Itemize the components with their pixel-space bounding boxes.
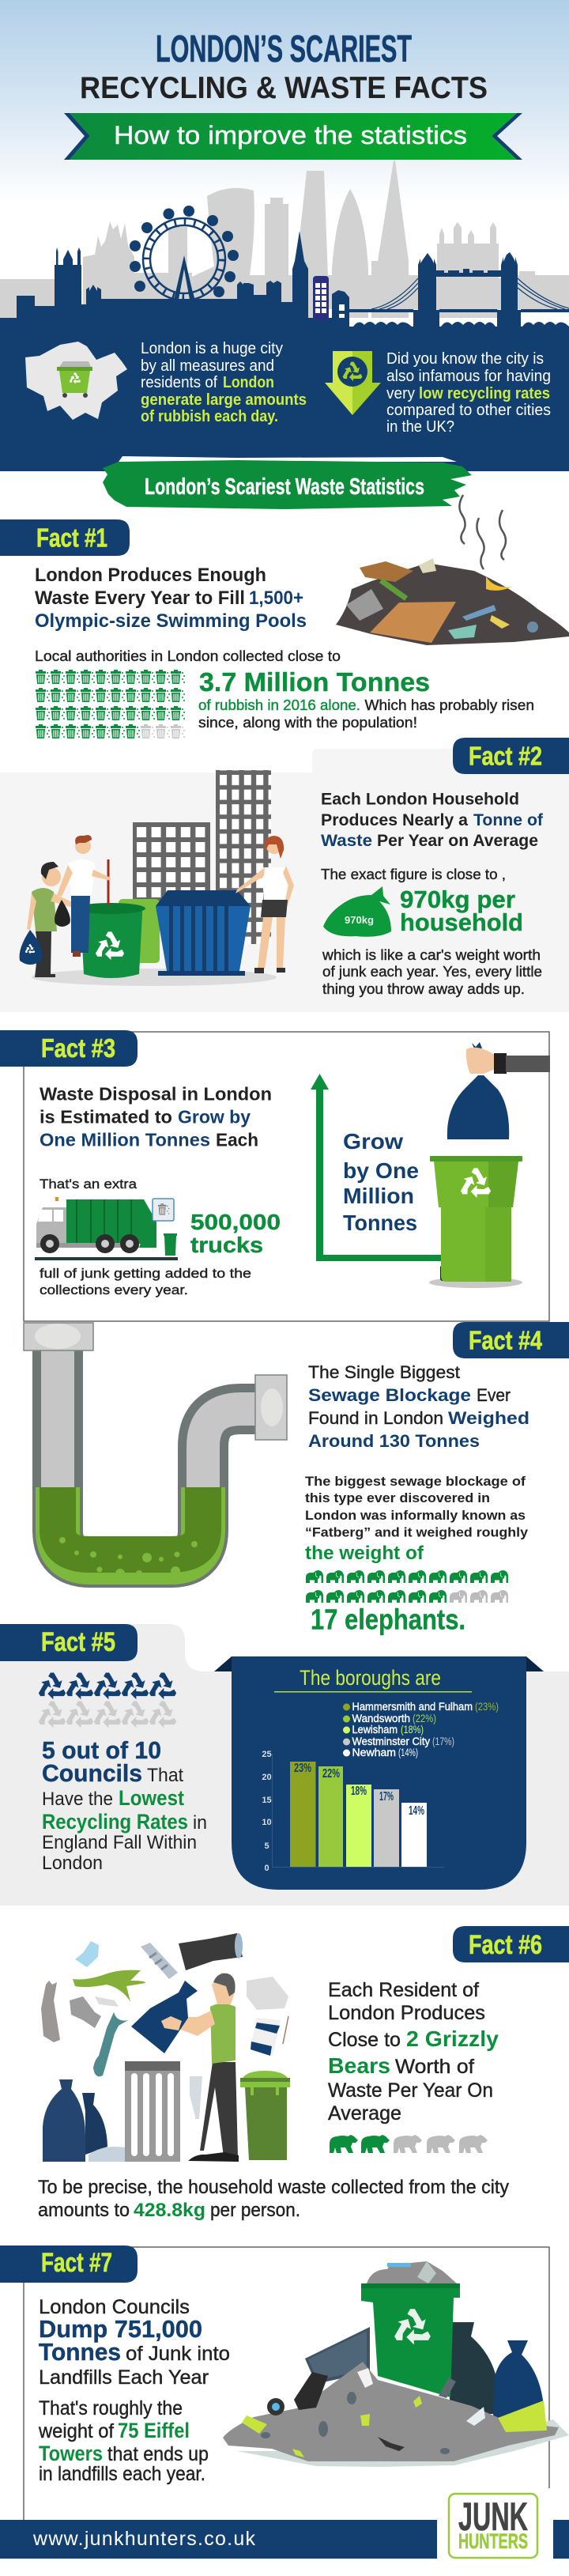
icon: hand dropping bag into bin (429, 1042, 550, 1288)
heading: fact 7: London Councils (39, 2296, 190, 2318)
heading: fact 7: Dump 751,000 (39, 2315, 202, 2343)
tab: fact 2 (453, 738, 569, 774)
heading: fact 2: Per Year on Average (377, 832, 538, 850)
text: intro right: very (386, 385, 415, 402)
text: 428.8kg: amounts to (38, 2200, 130, 2221)
bar chart: boroughs: 15 (262, 1796, 272, 1805)
text: eiffel towers: That's roughly the (39, 2397, 183, 2419)
heading: fact 5: England Fall Within (42, 1832, 197, 1853)
skyline: grey buildings (0, 161, 569, 319)
title: RECYCLING & WASTE FACTS (80, 71, 488, 105)
heading: fact 6 (328, 1979, 499, 2125)
text: car's weight (322, 947, 542, 997)
text: fatberg (305, 1474, 529, 1540)
text: grow by one million tonnes: Million (343, 1184, 414, 1208)
logo: Junk Hunters: HUNTERS (458, 2529, 528, 2553)
text: fatberg: The biggest sewage blockage of (305, 1474, 526, 1489)
banner: section heading: London’s Scariest Waste Statistics (145, 474, 424, 500)
text: grow by one million tonnes: Tonnes (343, 1211, 417, 1235)
heading: fact 6: London Produces (328, 2002, 485, 2024)
text: eiffel towers: that ends up (107, 2443, 209, 2465)
tab: fact 7: Fact #7 (41, 2248, 112, 2278)
text: 428.8kg: 428.8kg (134, 2200, 205, 2221)
panel: fact 2 (0, 738, 569, 1012)
bar chart: boroughs: 14% (409, 1804, 424, 1818)
panel: fact 7 (0, 2246, 569, 2520)
legend: boroughs: Westminster City (352, 1735, 430, 1747)
title: LONDON’S SCARIEST (156, 28, 412, 70)
bar chart: boroughs: 25 (262, 1750, 272, 1759)
stat: 970kg per household: household (400, 908, 523, 936)
text: intro right: also infamous for having (386, 368, 551, 385)
text: intro left (141, 340, 307, 425)
illustration: man throwing rubbish (41, 1933, 290, 2162)
white arches in gatehouse (339, 304, 345, 318)
text: intro left: London (223, 374, 274, 391)
text: eiffel towers: Towers (39, 2442, 103, 2465)
text: grow by one million tonnes: by One (343, 1158, 419, 1183)
icon: phone box (313, 276, 329, 320)
heading: fact 5: Recycling Rates (42, 1810, 188, 1834)
text: collections: full of junk getting added to the (40, 1266, 251, 1281)
heading: fact 2: Waste (321, 832, 372, 850)
text: collections (40, 1266, 251, 1297)
illustration: blocked pipe (24, 1323, 287, 1578)
text: intro left: residents of (141, 374, 217, 391)
tab: fact 6: Fact #6 (469, 1930, 542, 1960)
heading: boroughs: The boroughs are (300, 1666, 441, 1690)
chart: recycling symbols pictogram (35, 1672, 178, 1732)
text: fatberg: “Fatberg” and it weighed roughly (305, 1524, 529, 1540)
legend: boroughs: Wandsworth (352, 1712, 410, 1724)
tab: fact 5: Fact #5 (41, 1627, 115, 1657)
text: exact figure: The exact figure is close to , (321, 867, 506, 882)
tab: fact 1 (0, 519, 130, 556)
legend: boroughs: (23%) (475, 1700, 499, 1713)
heading: fact 5: 5 out of 10 (42, 1736, 161, 1764)
text: 428.8kg (38, 2177, 509, 2221)
stat: 3.7 million tonnes: 3.7 Million Tonnes (199, 667, 430, 697)
stat: 970kg per household: 970kg per (400, 886, 515, 913)
text: collections: collections every year. (40, 1282, 188, 1297)
text: fatberg: London was informally known as (305, 1508, 526, 1523)
heading: fact 3: is Estimated to (40, 1107, 172, 1127)
heading: fact 6: Bears (328, 2053, 390, 2078)
stat: 500,000 trucks (190, 1210, 281, 1257)
heading: fact 5: That (147, 1765, 183, 1786)
panel: boroughs chart (214, 1656, 544, 1890)
legend: boroughs: (22%) (413, 1712, 436, 1724)
heading: fact 6: Worth of (395, 2056, 474, 2078)
bar chart: boroughs: 20 (262, 1773, 272, 1782)
heading: fact 2: Each London Household (321, 791, 519, 808)
stat: 500,000 trucks: 500,000 (190, 1210, 281, 1234)
text: car's weight: which is like a car's weight worth (322, 947, 541, 963)
panel: fact 3 (0, 1030, 550, 1321)
logo: Junk Hunters: JUNK (458, 2495, 528, 2539)
text: car's weight: thing you throw away adds up. (322, 981, 525, 997)
heading: fact 4: Sewage Blockage (308, 1385, 471, 1405)
heading: fact 5: London (42, 1853, 103, 1874)
text: fatberg: this type ever discovered in (305, 1490, 490, 1505)
stat: 17 elephants: 17 elephants. (311, 1603, 465, 1635)
tab: fact 1: Fact #1 (36, 523, 107, 552)
legend: boroughs: Newham (352, 1746, 396, 1758)
stat: 3.7 million tonnes: Which has probably risen (365, 697, 534, 713)
figure: woman (236, 836, 294, 973)
panel: fact 1 (0, 495, 569, 738)
figure: man with broom (57, 835, 111, 957)
stat: 3.7 million tonnes (198, 667, 534, 731)
text: intro left: of rubbish each day. (141, 408, 278, 425)
icon: garbage truck (35, 1197, 178, 1260)
text: eiffel towers: weight of (38, 2420, 114, 2442)
text: grow by one million tonnes (343, 1129, 419, 1235)
tab: fact 5 (0, 1624, 138, 1661)
text: intro right: Did you know the city is (386, 350, 544, 368)
legend: boroughs: (18%) (401, 1723, 424, 1736)
bar chart: boroughs: 18% (351, 1785, 367, 1798)
heading: fact 5 (42, 1736, 207, 1874)
panel background (0, 749, 569, 1012)
text: intro left: generate large amounts (141, 391, 307, 409)
heading: fact 1 (35, 565, 307, 632)
panel: fact 4 (24, 1322, 569, 1635)
title (80, 28, 488, 105)
heading: fact 2: Tonne of (473, 811, 544, 829)
heading: fact 7 (39, 2296, 230, 2389)
heading: fact 6: Close to (328, 2029, 401, 2051)
heading: fact 4: Around 130 Tonnes (308, 1431, 480, 1451)
heading: fact 6: Average (328, 2102, 401, 2125)
panel: fact 6 (38, 1926, 569, 2221)
heading: fact 3: Waste Disposal in London (40, 1083, 272, 1104)
text: intro left: by all measures and (141, 357, 274, 375)
icon: London Eye (130, 206, 239, 300)
text: website: www.junkhunters.co.uk (32, 2528, 256, 2550)
bar chart: boroughs: 23% (294, 1762, 311, 1775)
banner: section heading (103, 456, 472, 509)
heading: fact 1: 1,500+ (249, 587, 303, 609)
ribbon: subtitle: How to improve the statistics (114, 121, 467, 149)
chart: bears pictogram (330, 2135, 488, 2153)
heading: fact 5: in (193, 1812, 207, 1834)
text: grow by one million tonnes: Grow (343, 1129, 403, 1154)
heading: fact 5: Lowest (119, 1786, 184, 1810)
bar chart: boroughs: 0 (264, 1864, 269, 1873)
heading: fact 4: Found in London (308, 1408, 443, 1428)
illustration: overflowing bin on landfill (223, 2261, 569, 2467)
text: car's weight: of junk each year. Yes, every little (322, 964, 542, 980)
heading: fact 4: The Single Biggest (308, 1362, 460, 1382)
tab: fact 3 (0, 1030, 138, 1067)
tab: fact 6 (453, 1926, 569, 1962)
tab: fact 4: Fact #4 (469, 1325, 543, 1355)
tab: fact 4 (453, 1322, 569, 1358)
heading: fact 4 (308, 1362, 529, 1451)
legend: boroughs: Lewisham (352, 1723, 398, 1736)
icon: down arrow with recycling symbol (325, 351, 381, 415)
text: eiffel towers: 75 Eiffel (118, 2419, 190, 2442)
tab: fact 7 (0, 2246, 138, 2283)
footer bar (0, 2520, 569, 2559)
heading: fact 2 (321, 791, 544, 850)
panel frame (24, 2247, 549, 2520)
heading: fact 3: Grow by (178, 1107, 251, 1127)
text: 428.8kg: per person. (210, 2200, 300, 2221)
text: intro right (386, 350, 551, 436)
text: intro right: low recycling rates (419, 385, 550, 402)
heading: fact 6: Each Resident of (328, 1979, 479, 2001)
heading: fact 1: Waste Every Year to Fill (35, 587, 245, 609)
tab: fact 3: Fact #3 (41, 1033, 115, 1063)
stat: 970kg per household (400, 886, 523, 936)
chart: elephants pictogram (306, 1570, 508, 1603)
heading: fact 5: Have the (42, 1788, 113, 1810)
heading: fact 1: Olympic-size Swimming Pools (35, 610, 307, 632)
panel frame (24, 1032, 549, 1321)
bar chart: boroughs (262, 1750, 444, 1873)
heading: fact 7: Tonnes (39, 2338, 121, 2366)
heading: fact 3 (40, 1083, 272, 1150)
heading: fact 4: Ever (477, 1385, 511, 1405)
legend: boroughs (343, 1700, 499, 1758)
icon: green rubbish bag: 970kg (345, 915, 374, 926)
stat: 3.7 million tonnes: of rubbish in 2016 alone. (198, 697, 360, 713)
bar chart: boroughs: 5 (264, 1841, 269, 1851)
text: intro left: London is a huge city (141, 340, 283, 357)
legend: boroughs: (14%) (398, 1746, 418, 1758)
text: extra: That's an extra (40, 1177, 138, 1192)
illustration: rubbish heap (336, 495, 569, 645)
text: eiffel towers: in landfills each year. (39, 2463, 205, 2485)
heading: fact 7: of Junk into (126, 2343, 230, 2365)
chart: bins pictogram (36, 670, 185, 738)
heading: fact 2: Produces Nearly a (321, 811, 468, 829)
text: local authorities: Local authorities in London collected close to (35, 648, 341, 664)
heading: fact 7: Landfills Each Year (39, 2366, 209, 2389)
illustration: people recycling (20, 770, 294, 986)
panel background (0, 1624, 569, 1906)
header background (0, 0, 569, 202)
arrow: growth (311, 1074, 444, 1261)
icon: London map with bin (25, 342, 127, 420)
bar chart: boroughs: 17% (379, 1790, 394, 1804)
panel: fact 5 (0, 1624, 569, 1906)
text: intro right: in the UK? (386, 418, 454, 436)
skyline: navy landmarks (0, 231, 569, 471)
heading: fact 6: 2 Grizzly (406, 2026, 499, 2051)
heading: fact 6: Waste Per Year On (328, 2079, 493, 2102)
heading: fact 3: Each (216, 1129, 258, 1150)
bar chart: boroughs: 10 (262, 1818, 272, 1827)
stat: 3.7 million tonnes: since, along with the population! (198, 715, 417, 731)
heading: fact 3: One Million Tonnes (40, 1129, 210, 1150)
heading: fact 4: Weighed (448, 1408, 529, 1428)
text: eiffel towers (38, 2397, 209, 2485)
tab: fact 2: Fact #2 (469, 742, 542, 770)
logo: Junk Hunters (449, 2494, 537, 2558)
text: the weight of: the weight of (305, 1543, 424, 1564)
stat: 500,000 trucks: trucks (190, 1233, 263, 1257)
figure: man with bags (20, 862, 79, 977)
text: 428.8kg: To be precise, the household waste collected from the city (38, 2177, 509, 2198)
heading: fact 5: Councils (42, 1759, 142, 1787)
icon: green rubbish bag (323, 886, 391, 937)
bar chart: boroughs: 22% (322, 1767, 340, 1781)
ribbon: subtitle (64, 113, 522, 160)
heading: fact 1: London Produces Enough (35, 565, 266, 586)
legend: boroughs: (17%) (432, 1735, 454, 1747)
text: intro right: compared to other cities (386, 402, 551, 419)
legend: boroughs: Hammersmith and Fulham (352, 1700, 473, 1713)
